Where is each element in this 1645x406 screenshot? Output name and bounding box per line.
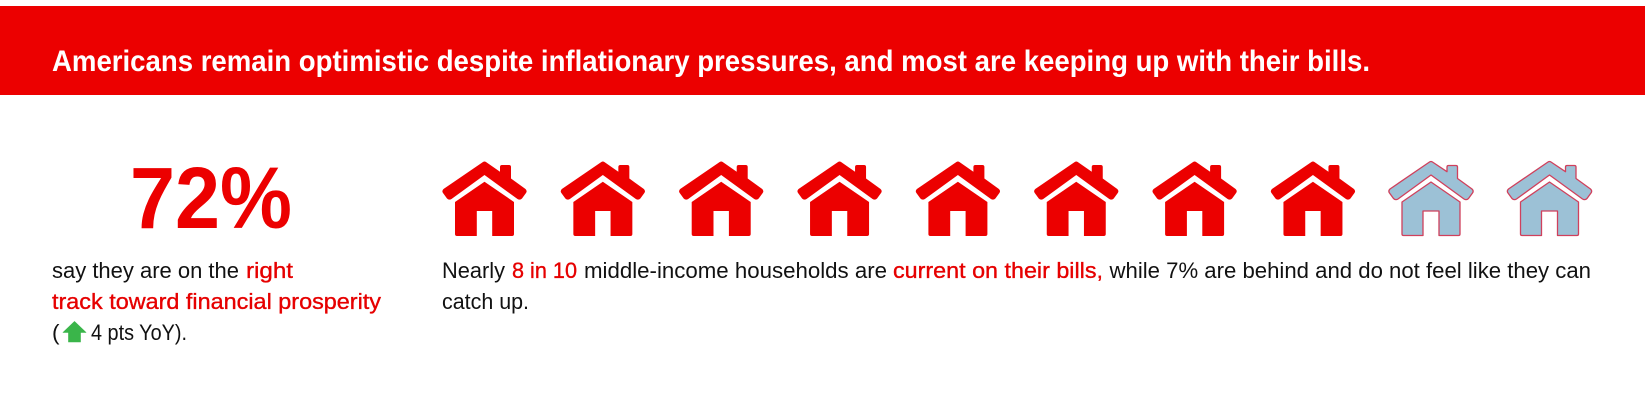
statistic description: (: [52, 320, 60, 345]
icon: house 8 red: [1271, 162, 1355, 236]
text block: households description: while 7% are behind and do not feel like they can: [1109, 258, 1591, 283]
statistic description: right: [246, 258, 294, 283]
panel: house pictogram: [442, 162, 1592, 236]
text block: households description: Nearly: [442, 258, 506, 283]
icon: house 1 red: [442, 162, 527, 236]
text block: households description: middle-income households are: [584, 258, 887, 283]
statistic description: track toward financial prosperity: [52, 289, 382, 314]
title: Americans remain optimistic despite inflationary pressures, and most are keeping up with their bills.: [52, 45, 1370, 78]
statistic description: say they are on the: [52, 258, 239, 283]
statistic description: [52, 258, 382, 345]
text block: households description: catch up.: [442, 289, 529, 314]
header banner: [0, 6, 1645, 95]
icon: house 10 blue: [1507, 162, 1592, 236]
text block: households description: [442, 258, 1591, 314]
icon: house 6 red: [1034, 162, 1118, 236]
icon: house 5 red: [916, 162, 1000, 236]
text block: households description: current on their bills,: [893, 258, 1103, 283]
icon: house 7 red: [1152, 162, 1237, 236]
icon: house 4 red: [797, 162, 882, 236]
icon: house 2 red: [561, 162, 645, 236]
text block: households description: 8 in 10: [512, 258, 577, 283]
statistic description: 4 pts YoY).: [91, 320, 187, 345]
panel: 72 percent statistic: [52, 150, 382, 345]
icon: house 3 red: [679, 162, 763, 236]
icon: green up arrow: [63, 322, 86, 342]
icon: house 9 blue: [1389, 162, 1473, 236]
big number: 72%: [130, 150, 292, 247]
